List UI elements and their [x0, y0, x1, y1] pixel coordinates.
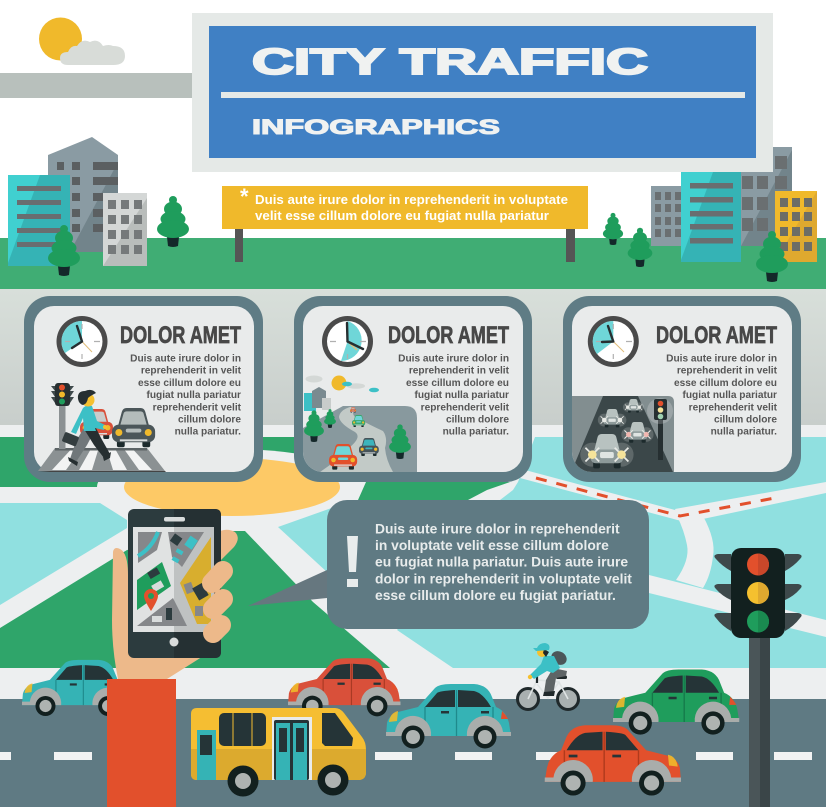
phone map	[137, 532, 211, 626]
text 1: nulla pariatur.	[175, 427, 241, 438]
fingers	[212, 571, 223, 633]
buildings: right group	[651, 147, 817, 262]
text 1: Duis aute irure dolor in	[130, 354, 241, 364]
ground: green strip	[0, 238, 826, 289]
text 2: nulla pariatur.	[443, 427, 509, 438]
band behind panels	[0, 289, 826, 425]
text 3: reprehenderit in velit	[677, 366, 778, 377]
cyclist	[518, 643, 578, 710]
text 3: Duis aute irure dolor in	[666, 354, 777, 364]
title: CITY TRAFFIC	[252, 41, 648, 82]
city map background	[0, 425, 826, 675]
subtitle: INFOGRAPHICS	[252, 116, 500, 139]
speech bubble callout	[248, 500, 649, 629]
yellow sign: Duis aute irure dolor in reprehenderit in voluptate	[255, 193, 568, 207]
sun and cloud	[39, 18, 125, 65]
panel 2: road scene	[294, 296, 532, 482]
panel 1: pedestrian crossing	[24, 296, 263, 482]
icon: location pin	[144, 589, 158, 611]
callout text: in voluptate velit esse cillum dolore	[375, 537, 609, 553]
bus	[191, 708, 366, 796]
text 2: Duis aute irure dolor in	[398, 354, 509, 364]
buildings: left group	[8, 137, 147, 266]
yellow sign	[222, 184, 588, 262]
text 1	[130, 354, 242, 438]
text 1: reprehenderit in velit	[141, 366, 242, 377]
illustration: crossing	[38, 383, 166, 472]
clock 3	[588, 316, 639, 367]
text 3: nulla pariatur.	[711, 427, 777, 438]
background: sky	[0, 0, 826, 238]
text 1: cillum dolore	[178, 414, 241, 426]
trees: right	[603, 213, 788, 282]
car: red back	[288, 658, 400, 716]
text 2: esse cillum dolore eu	[406, 378, 509, 389]
clock 2	[322, 316, 373, 367]
road overpass bar	[0, 73, 192, 98]
callout text: Duis aute irure dolor in reprehenderit	[375, 520, 620, 536]
text 1: reprehenderit velit	[153, 402, 242, 413]
road: pavement and asphalt	[0, 668, 826, 807]
panel 3: night traffic	[563, 296, 801, 482]
illustration: winding road	[303, 376, 417, 472]
heading 3: DOLOR AMET	[656, 322, 777, 349]
traffic light	[714, 548, 802, 807]
clock 1	[56, 316, 108, 367]
text 3: reprehenderit velit	[689, 402, 778, 413]
title billboard	[192, 13, 773, 172]
callout text: esse cillum dolore eu fugiat pariatur.	[375, 587, 616, 603]
text 3: cillum dolore	[714, 414, 777, 426]
text 3	[666, 354, 778, 438]
callout text	[375, 520, 632, 603]
callout text: dolor in reprehenderit in voluptate velit	[375, 570, 632, 586]
car: red front	[545, 725, 681, 796]
hand holding phone	[107, 509, 238, 807]
car: teal far left	[22, 660, 131, 716]
text 3: esse cillum dolore eu	[674, 378, 777, 389]
arm sleeve	[107, 679, 176, 807]
red dashed route	[536, 478, 780, 516]
yellow sign: velit esse cillum dolore eu fugiat nulla pariatur	[255, 209, 549, 223]
text 2: reprehenderit in velit	[409, 366, 510, 377]
heading 2: DOLOR AMET	[388, 322, 509, 349]
illustration: cars at night	[572, 396, 674, 472]
car: teal middle	[386, 684, 511, 748]
text 1: fugiat nulla pariatur	[146, 390, 241, 401]
trees: left	[48, 196, 189, 276]
text 3: fugiat nulla pariatur	[682, 390, 777, 401]
text 2	[398, 354, 510, 438]
text 1: esse cillum dolore eu	[138, 378, 241, 389]
text 2: cillum dolore	[446, 414, 509, 426]
car: green	[613, 669, 739, 735]
callout text: eu fugiat nulla pariatur. Duis aute irure	[375, 554, 628, 570]
icon: exclamation mark	[347, 536, 358, 587]
text 2: reprehenderit velit	[421, 402, 510, 413]
smartphone	[128, 509, 221, 658]
text 2: fugiat nulla pariatur	[414, 390, 509, 401]
heading 1: DOLOR AMET	[120, 322, 241, 349]
yellow sign: *	[240, 184, 249, 209]
